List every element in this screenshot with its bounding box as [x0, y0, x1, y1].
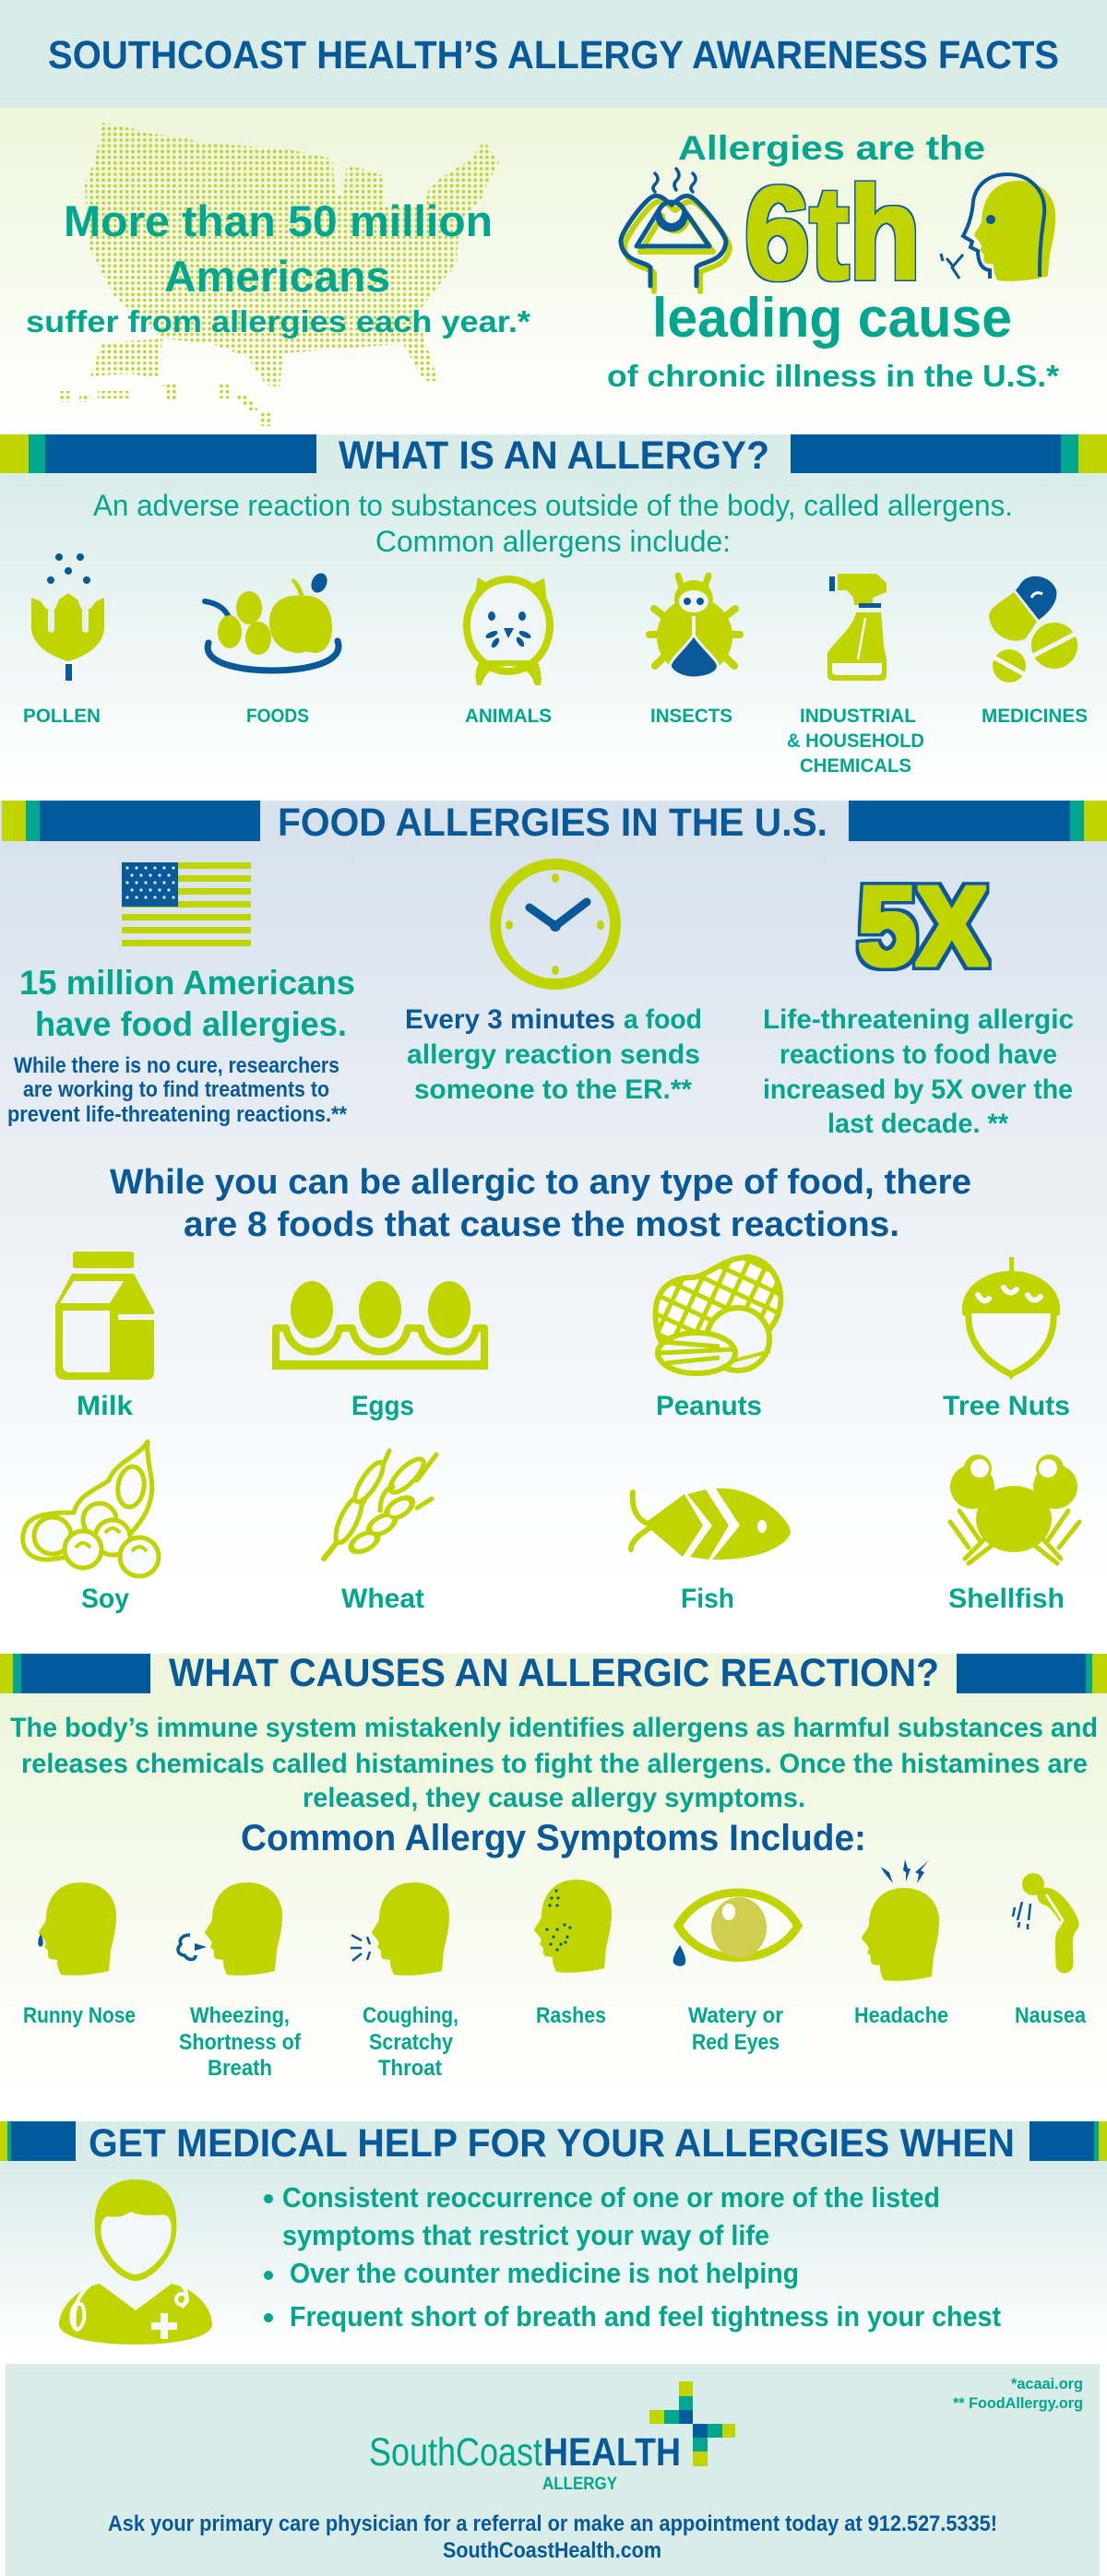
allergen labels: MEDICINES: [982, 706, 1088, 727]
footnotes: *acaai.org: [1011, 2375, 1083, 2392]
food labels row two: Fish: [681, 1584, 734, 1614]
food labels row one: Tree Nuts: [943, 1391, 1070, 1421]
food labels row one: [77, 1391, 1070, 1421]
section header: what is an allergy: WHAT IS AN ALLERGY?: [339, 433, 769, 478]
allergen labels: CHEMICALS: [800, 755, 911, 777]
logo: SouthCoast: [369, 2430, 542, 2475]
panel: 50 million Americans: [26, 123, 530, 426]
symptom labels: Headache: [854, 2003, 948, 2028]
allergen labels: POLLEN: [23, 706, 101, 727]
panel: 6th leading cause: [607, 129, 1059, 393]
footnotes: [953, 2375, 1083, 2412]
reaction explanation text: released, they cause allergy symptoms.: [303, 1783, 805, 1813]
statistic text: [26, 196, 530, 338]
big 6th: 6th: [744, 160, 921, 307]
icon: rashes: [534, 1880, 612, 1973]
statistic text: More than 50 million: [64, 196, 493, 245]
allergen labels: ANIMALS: [465, 706, 552, 727]
icon: foods: [205, 571, 339, 671]
medical help list: [264, 2181, 1001, 2333]
allergy definition text: Common allergens include:: [375, 525, 731, 558]
icon: flag: [122, 862, 251, 946]
panel: every 3 minutes: Every 3 minutes: [405, 1004, 615, 1035]
icon: peanuts: [656, 1257, 780, 1373]
symptom labels: Coughing,: [363, 2003, 458, 2028]
food labels row two: Soy: [81, 1584, 129, 1614]
panel: common allergens: [23, 553, 1088, 777]
panel: 15 million Americans: are working to find treatments to: [23, 1077, 329, 1102]
symptom labels: Watery or: [688, 2003, 783, 2028]
panel: 5X increase: Life-threatening allergic: [763, 1004, 1074, 1035]
icon: nausea: [1013, 1873, 1070, 1965]
allergy definition text: An adverse reaction to substances outside of the body, called allergens.: [93, 489, 1013, 522]
icon: fish: [631, 1489, 791, 1560]
subheading: symptoms: Common Allergy Symptoms Include:: [241, 1818, 866, 1858]
panel: 5X increase: 5X: [858, 863, 987, 989]
logo: [369, 2381, 735, 2494]
allergen labels: & HOUSEHOLD: [787, 730, 924, 752]
medical help list: Consistent reoccurrence of one or more of the listed: [282, 2181, 940, 2214]
icon: pollen: [31, 553, 104, 681]
icon: runny nose: [39, 1882, 116, 1976]
panel: 15 million Americans: While there is no cure, researchers: [14, 1053, 339, 1078]
panel: symptoms: [23, 1859, 1087, 2081]
icon: milk: [55, 1252, 154, 1380]
panel: every 3 minutes: a food: [624, 1004, 702, 1035]
panel: every 3 minutes: [405, 864, 702, 1105]
title banner: SOUTHCOAST HEALTH’S ALLERGY AWARENESS FACTS: [48, 33, 1059, 77]
title banner: [0, 0, 1107, 108]
icon: head with breath: [941, 174, 1055, 281]
subheading: 8 foods: While you can be allergic to any type of food, there: [110, 1163, 971, 1202]
panel: eight foods: [23, 1252, 1079, 1614]
panel: 15 million Americans: 15 million Americans: [19, 964, 355, 1002]
allergen labels: [23, 706, 1088, 777]
medical help list: symptoms that restrict your way of life: [282, 2219, 769, 2251]
icon: medicines: [989, 576, 1077, 683]
symptom labels: [23, 2003, 1087, 2081]
icon: tree nuts acorn: [962, 1257, 1060, 1381]
symptom labels: Scratchy: [369, 2030, 454, 2055]
panel: every 3 minutes: allergy reaction sends: [407, 1039, 700, 1070]
food labels row two: [81, 1584, 1065, 1614]
call to action: Ask your primary care physician for a referral or make an appointment today at 912.527.5335!: [108, 2511, 997, 2536]
symptom labels: Runny Nose: [23, 2003, 136, 2028]
panel: 5X increase: last decade. **: [827, 1109, 1008, 1139]
section header: food allergies: FOOD ALLERGIES IN THE U.S.: [278, 801, 827, 845]
icon: shellfish crab: [950, 1454, 1079, 1563]
dotted US map: [59, 123, 499, 426]
panel: 15 million Americans: prevent life-threatening reactions.**: [7, 1102, 348, 1127]
symptom labels: Red Eyes: [692, 2030, 780, 2055]
icon: wheat: [324, 1451, 436, 1560]
section header: what causes a reaction: WHAT CAUSES AN ALLERGIC REACTION?: [169, 1651, 939, 1695]
call to action: [108, 2511, 997, 2563]
statistic text: suffer from allergies each year.*: [26, 304, 530, 338]
food labels row two: Wheat: [341, 1584, 424, 1614]
subheading: 8 foods: [110, 1163, 971, 1244]
symptom labels: Shortness of: [179, 2030, 302, 2055]
icon: coughing: [351, 1882, 449, 1976]
food labels row one: Milk: [77, 1391, 133, 1421]
panel: 15 million Americans: have food allergies.: [35, 1005, 347, 1043]
icon: stressed person: [621, 169, 730, 291]
food labels row one: Peanuts: [656, 1391, 762, 1421]
section header: what is an allergy: [0, 433, 1107, 478]
footer panel: [6, 2364, 1100, 2576]
panel: 5X increase: increased by 5X over the: [763, 1074, 1073, 1105]
symptom labels: Throat: [378, 2056, 442, 2081]
icon: animals: [467, 577, 550, 685]
panel: 5X increase: reactions to food have: [780, 1039, 1057, 1070]
icon: insects: [649, 576, 740, 678]
icon: chemicals spray bottle: [827, 574, 887, 681]
reaction explanation text: [10, 1713, 1098, 1813]
icon: soy: [23, 1442, 159, 1576]
panel: 6th leading cause: of chronic illness in the U.S.*: [607, 359, 1059, 393]
statistic text: Americans: [164, 252, 390, 301]
food labels row two: Shellfish: [948, 1584, 1065, 1614]
subheading: 8 foods: are 8 foods that cause the most reactions.: [184, 1205, 899, 1244]
icon: wheezing: [178, 1882, 282, 1976]
logo: HEALTH: [543, 2430, 681, 2475]
medical help list: Frequent short of breath and feel tightness in your chest: [290, 2300, 1001, 2333]
allergen labels: INDUSTRIAL: [800, 706, 916, 727]
panel: every 3 minutes: someone to the ER.**: [414, 1074, 692, 1105]
icon: eggs: [272, 1281, 488, 1370]
panel: 6th leading cause: leading cause: [652, 287, 1012, 349]
symptom labels: Wheezing,: [190, 2003, 290, 2028]
icon: clock: [495, 864, 615, 984]
panel: 15 million Americans: [7, 862, 355, 1127]
symptom labels: Breath: [208, 2056, 272, 2081]
medical help list: Over the counter medicine is not helping: [290, 2257, 799, 2289]
icon: doctor: [59, 2179, 212, 2345]
icon: headache: [862, 1859, 939, 1981]
logo: ALLERGY: [542, 2475, 617, 2494]
section header: get medical help: GET MEDICAL HELP FOR YOUR ALLERGIES WHEN: [89, 2121, 1015, 2166]
section header: food allergies: [0, 801, 1107, 845]
symptom labels: Rashes: [536, 2003, 606, 2028]
panel: 5X increase: [763, 863, 1074, 1139]
allergen labels: FOODS: [246, 706, 309, 727]
icon: watery eyes: [673, 1893, 798, 1966]
food labels row one: Eggs: [351, 1391, 414, 1421]
panel: 6th leading cause: Allergies are the: [678, 129, 985, 167]
call to action: SouthCoastHealth.com: [443, 2538, 661, 2563]
footnotes: ** FoodAllergy.org: [953, 2394, 1083, 2412]
symptom labels: Nausea: [1015, 2003, 1087, 2028]
allergy definition text: [93, 489, 1013, 558]
reaction explanation text: releases chemicals called histamines to fight the allergens. Once the histamines are: [21, 1749, 1088, 1779]
allergen labels: INSECTS: [650, 706, 732, 727]
